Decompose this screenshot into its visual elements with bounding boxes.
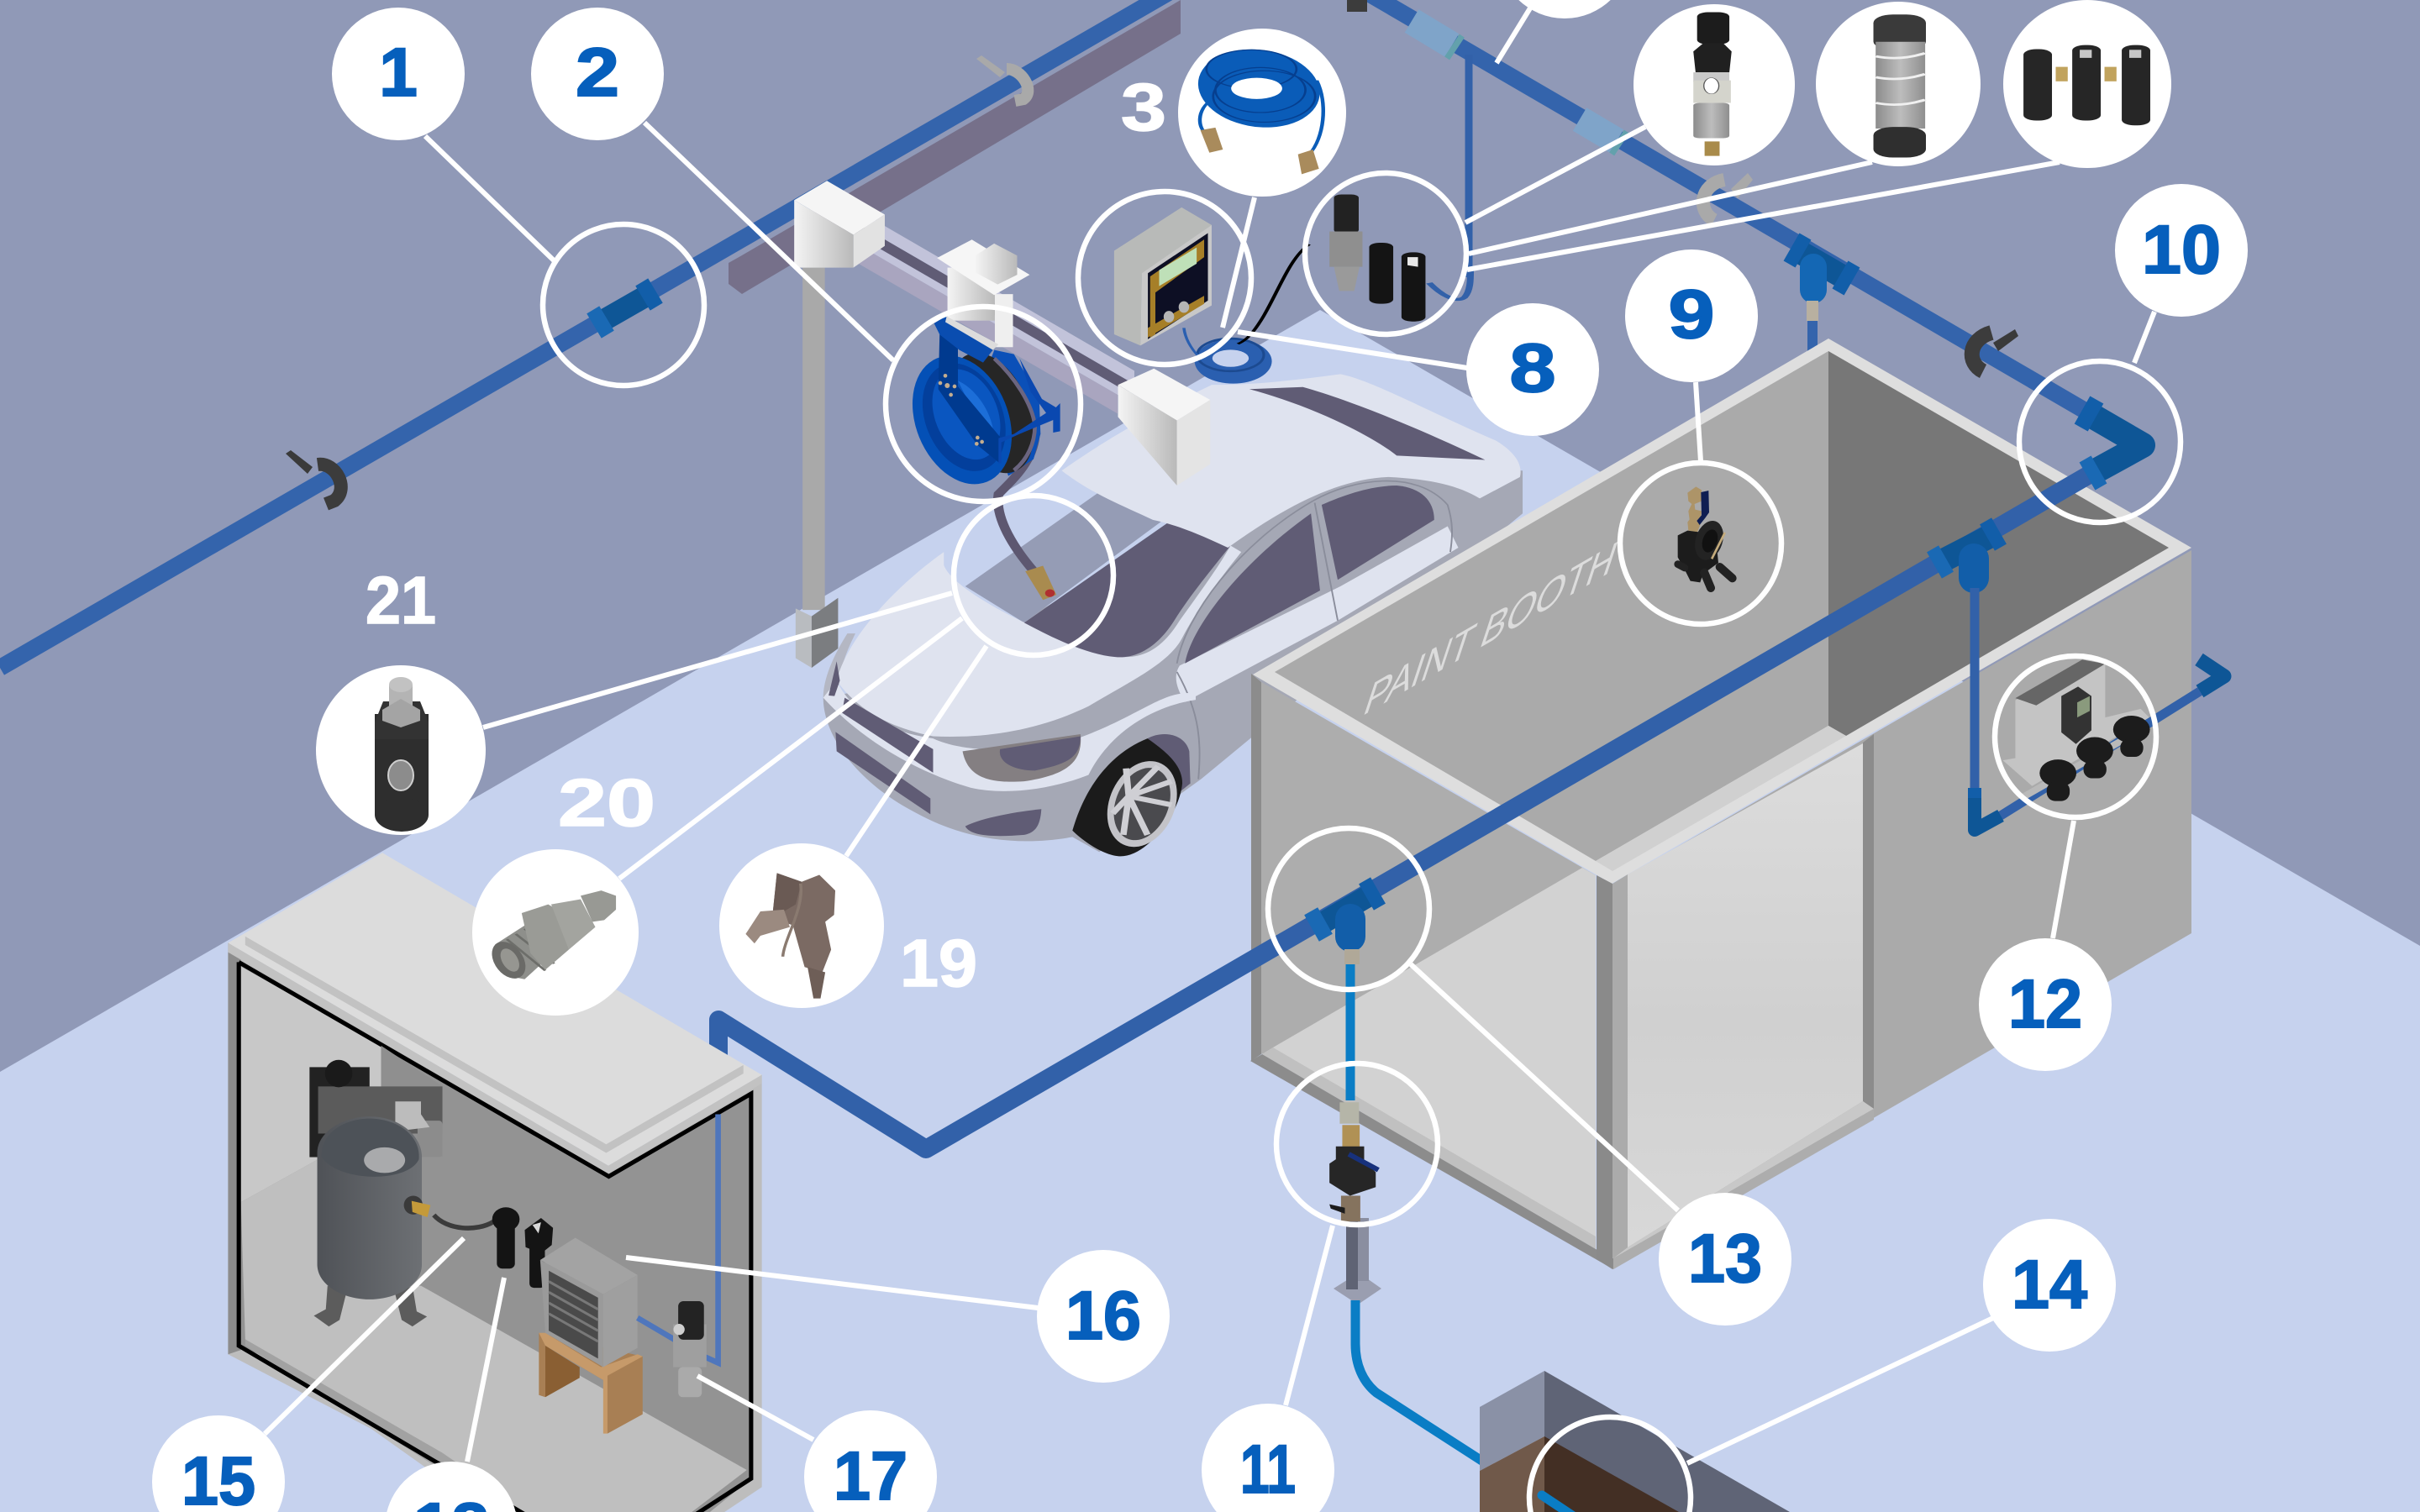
reel: strap (994, 359, 1035, 470)
booth: floor lip (1262, 1047, 1596, 1249)
elbow fitting at corner (2082, 410, 2143, 476)
label 19: 19 (900, 926, 977, 1000)
number bubble 9 (1625, 249, 1758, 382)
dispenser: port 2 (1704, 573, 1711, 588)
dispenser: brass pin (1711, 532, 1726, 559)
booth: pillar (1597, 874, 1628, 1269)
number bubble 13: 13 (1688, 1221, 1762, 1297)
top pipe sleeve 1 (1412, 21, 1457, 49)
ring: coupling (543, 224, 704, 386)
trench: blue pipe (1542, 1495, 1580, 1512)
trench: soil dark (1544, 1436, 1679, 1512)
ring: regulator (1305, 173, 1466, 334)
number bubble 9: 9 (1669, 276, 1714, 353)
number bubble 16 (1037, 1250, 1170, 1383)
number bubble 17 (804, 1410, 937, 1512)
reel: top bracket (934, 317, 993, 363)
booth (1250, 339, 2191, 1269)
leader 14 (1687, 1318, 1993, 1463)
photo bubble: socket 21 (316, 665, 486, 835)
number bubble 18 (385, 1462, 518, 1512)
reel: disc ring (908, 351, 1021, 484)
car: wheel arch (1148, 734, 1191, 792)
room: frame left side (228, 942, 241, 1354)
main air pipe: booth run (718, 470, 2096, 1149)
leader 15 (265, 1238, 464, 1434)
top pipe sleeve 2 (1580, 119, 1622, 144)
photo bubble: filter element (1816, 2, 1981, 166)
top pipe clamp left end (1347, 0, 1367, 12)
main air pipe: left wall (0, 0, 1185, 668)
car: post seen through windscreen (965, 492, 1164, 622)
number bubble 11 (1202, 1404, 1334, 1512)
leader 11 (1286, 1226, 1333, 1405)
drop pipe to booth (1807, 286, 1818, 353)
T fitting on top pipe (1791, 247, 1852, 321)
car: side belt (1176, 527, 1459, 702)
top partial bubble (1498, 0, 1631, 18)
number bubble 2: 2 (576, 34, 619, 111)
ring: hose fitting (954, 496, 1113, 655)
photo bubble: plug 20 (472, 849, 639, 1016)
photo bubble: triple filter (2003, 0, 2171, 168)
ring: air treatment (1995, 656, 2156, 817)
lower elbow fitting (1968, 793, 2001, 830)
leader filter (1469, 162, 1872, 254)
car: lower grille (835, 732, 930, 814)
dispenser: brass stem (1687, 486, 1702, 532)
room: tank outlet fitting (404, 1195, 430, 1217)
pipe clamp: grey (976, 55, 1028, 101)
top air pipe (1365, 0, 2092, 415)
dispenser: diaphragm (1690, 517, 1728, 564)
reel: carriage foot (945, 317, 998, 350)
pipe clamp: grey top (1703, 173, 1753, 220)
reel: side bracket (998, 359, 1060, 464)
overhead gantry rails (855, 208, 1134, 413)
air treatment unit in booth wall (2003, 659, 2150, 801)
room: air receiver tank (313, 1116, 427, 1326)
booth: outer right wall (1613, 550, 2191, 1269)
room: dryer stand (539, 1333, 643, 1434)
leader 20 (619, 618, 962, 879)
car: side marker (829, 661, 839, 696)
coupling on left wall pipe (594, 291, 655, 326)
booth: door head band (1596, 726, 1846, 871)
room: refrigerated dryer (540, 1237, 638, 1368)
room: compressor motor (309, 1060, 443, 1158)
booth: inner floor (1262, 868, 1596, 1249)
leader top (1497, 0, 1538, 63)
gauge box (1114, 207, 1212, 357)
room: black edge (239, 962, 751, 1512)
leader 1 (425, 136, 554, 260)
ring: T fitting (1268, 828, 1429, 990)
room: compressor block (381, 1046, 443, 1158)
car (823, 374, 1523, 856)
reel: bolts (939, 374, 984, 446)
number bubble 8 (1466, 303, 1599, 436)
room: top slab (228, 853, 762, 1166)
regulator (1329, 195, 1362, 291)
dispenser in ring 9 (1678, 486, 1733, 588)
trench (1480, 1371, 1790, 1512)
trench: left face (1480, 1371, 1544, 1471)
car: windscreen (1024, 522, 1230, 657)
number bubble 12 (1979, 938, 2112, 1071)
leader 2 (644, 123, 893, 360)
wall rail behind pipe (729, 0, 1181, 294)
car: grille (842, 698, 933, 773)
booth: door sill (1613, 1101, 1874, 1258)
room: black filter 2 (524, 1218, 553, 1288)
reel: drum (933, 340, 1050, 486)
booth wall drop pipe (1975, 588, 2200, 827)
room: floor lip (245, 1339, 511, 1509)
room: outlet filter (673, 1301, 707, 1397)
label 20: 20 (558, 765, 655, 840)
car: door lines (1177, 481, 1452, 780)
pipe clamp: dark (286, 450, 341, 504)
compressor room (228, 853, 762, 1512)
T fitting on booth front pipe (1312, 890, 1378, 964)
car: hood (837, 545, 1241, 737)
trench: soil left (1480, 1436, 1544, 1512)
booth: inner right wall (1828, 351, 2169, 736)
booth: door pillar (1863, 734, 1874, 1109)
room: outlet pipe (638, 1115, 718, 1362)
room: black filter 1 (492, 1207, 519, 1268)
reel: arm (939, 330, 1000, 464)
room: left wall (241, 967, 381, 1202)
gantry box right (1118, 369, 1210, 486)
room: floor (241, 1159, 747, 1512)
dispenser: port 3 (1720, 567, 1733, 578)
room: slab inset (245, 937, 744, 1152)
car: left fender edge (823, 633, 855, 702)
number bubble 11: 11 (1240, 1431, 1296, 1508)
reel: rear flange (981, 350, 1040, 476)
photo bubble: blow gun 19 (719, 843, 884, 1008)
number bubble 1 (332, 8, 465, 140)
number bubble 10: 10 (2142, 212, 2221, 288)
floor (0, 310, 2420, 1512)
ring: valve (1276, 1063, 1438, 1225)
dispenser: body (1678, 531, 1718, 582)
gantry post and box left (794, 181, 885, 668)
dispenser: port 1 (1678, 564, 1685, 568)
label 3: 3 (1121, 70, 1166, 144)
reel: disc hub highlight (958, 381, 993, 431)
booth: lower edge (1613, 1109, 1874, 1269)
number bubble 12: 12 (2008, 966, 2082, 1042)
leader 10 (2134, 312, 2154, 363)
leader 17 (697, 1376, 813, 1440)
ring: elbow (2019, 361, 2181, 522)
blue hose to valve (1346, 964, 1355, 1100)
leader 19 (846, 646, 986, 856)
filter tube 2 (1402, 252, 1425, 322)
room: back wall (239, 964, 751, 1512)
filter tube 1 (1369, 243, 1393, 304)
booth title text: PAINT BOOTH (1358, 531, 1623, 727)
ring: hose reel (886, 307, 1081, 501)
leader triple filter (1467, 162, 2060, 270)
support post (1334, 1218, 1381, 1305)
booth: inner left wall (1275, 351, 1828, 861)
photo bubble: regulator (1634, 4, 1795, 165)
booth: bottom frame (1250, 1054, 1613, 1269)
leader lines (265, 0, 2154, 1463)
air hose with fitting (998, 436, 1056, 600)
T fitting on booth roof pipe (1934, 531, 1999, 578)
leader 21 (483, 593, 952, 727)
ring: trench (1529, 1417, 1691, 1512)
pipe clamp: dark top (1972, 329, 2018, 371)
car: rear side window (1322, 486, 1434, 580)
number bubble 13 (1659, 1193, 1791, 1326)
hose coil on floor (1195, 339, 1272, 384)
gantry carriage (937, 239, 1029, 347)
room: outer frame (228, 942, 762, 1512)
leader 9 (1696, 382, 1701, 461)
number bubble 2 (531, 8, 664, 140)
regulator and filters group (1238, 195, 1470, 344)
dispenser: blue lever (1697, 491, 1709, 525)
leader 3 (1223, 197, 1255, 328)
number bubble 16: 16 (1065, 1278, 1141, 1354)
number bubble 14 (1983, 1219, 2116, 1352)
ring: dispenser (1620, 463, 1781, 624)
room: top slab front edge (228, 942, 762, 1173)
label 21: 21 (366, 563, 436, 638)
reel: front disc (894, 341, 1030, 499)
leader 8 (1238, 332, 1467, 368)
car: wheel (1072, 738, 1187, 856)
rings around details (543, 173, 2181, 1512)
booth: door panel (1628, 743, 1863, 1247)
number bubble 15 (152, 1415, 285, 1512)
booth: front left wall (1261, 682, 1596, 1054)
leader 18 (467, 1278, 504, 1462)
photo bubble: hose coil (1178, 29, 1346, 197)
car: lower body highlight (823, 680, 1196, 791)
trench: right face (1544, 1371, 1790, 1512)
hose reel (894, 317, 1060, 499)
ball valve assembly (1329, 1102, 1380, 1221)
blue outlet (1429, 270, 1470, 299)
number bubble 1: 1 (379, 34, 418, 111)
booth: left frame (1251, 674, 1261, 1061)
booth: rim (1253, 339, 2191, 884)
car: roof (1062, 374, 1521, 548)
leader 12 (2053, 821, 2074, 938)
car: fog lamp (965, 809, 1041, 836)
ring: gauge (1078, 192, 1251, 365)
number bubble 8: 8 (1509, 330, 1556, 407)
black feed hose (1238, 244, 1309, 344)
car: headlight (963, 734, 1081, 782)
car: lower body (823, 466, 1523, 852)
lower blue hose (1355, 1300, 1483, 1462)
leader regulator (1465, 127, 1645, 223)
leader 13 (1411, 964, 1678, 1210)
number bubble 10 (2115, 184, 2248, 317)
number bubble 14: 14 (2012, 1247, 2087, 1323)
dispenser: diaphragm centre (1699, 528, 1721, 554)
right wall elbow fitting (2199, 659, 2224, 691)
leader 16 (626, 1257, 1038, 1308)
reel: disc inner (919, 359, 1013, 470)
car: front window (1185, 513, 1320, 664)
vertical thin pipe (1465, 55, 1472, 277)
car: rear window (1249, 387, 1485, 459)
room: hose (434, 1215, 494, 1228)
